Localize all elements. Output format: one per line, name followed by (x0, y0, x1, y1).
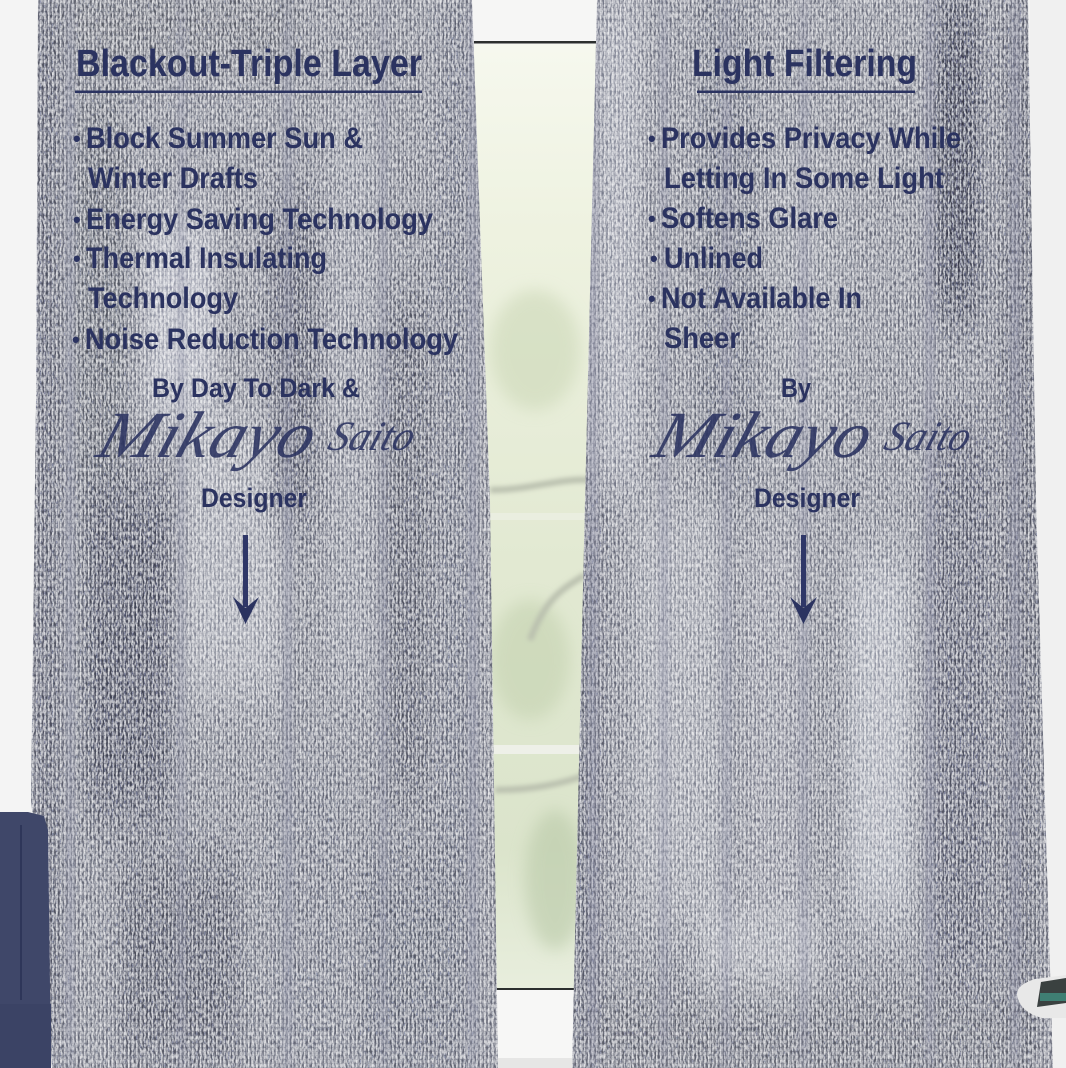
left curtain feature list: Technology (88, 282, 238, 315)
left designer credit: Saito (323, 414, 422, 460)
left designer credit: Mikayo (88, 399, 327, 472)
sofa (0, 812, 51, 1068)
left designer credit: Designer (201, 483, 307, 513)
right curtain feature list: • (648, 126, 656, 151)
right curtain heading: Light Filtering (692, 43, 917, 85)
left curtain feature list: • (72, 327, 80, 352)
panel: right curtain (560, 0, 1060, 1068)
window (470, 0, 600, 1068)
right designer credit: Saito (879, 414, 978, 460)
right curtain feature list: • (648, 206, 656, 231)
icon: left down arrow (233, 535, 259, 624)
left designer credit: By Day To Dark & (152, 373, 360, 403)
right curtain feature list: Not Available In (661, 282, 862, 315)
right curtain feature list: Unlined (664, 242, 763, 275)
left curtain feature list: • (73, 126, 81, 151)
left curtain feature list: • (73, 246, 81, 271)
right curtain feature list: Letting In Some Light (664, 162, 944, 195)
side table with tablet (1017, 975, 1066, 1018)
right designer credit (644, 373, 978, 513)
left curtain feature list: Block Summer Sun & (86, 122, 363, 155)
right curtain feature list: Sheer (664, 322, 740, 355)
panel: left curtain (20, 0, 510, 1068)
left curtain feature list: Noise Reduction Technology (85, 323, 458, 356)
left curtain feature list: Thermal Insulating (86, 242, 327, 275)
left curtain feature list: Winter Drafts (88, 162, 258, 195)
right curtain feature list (648, 122, 961, 355)
left curtain feature list: Energy Saving Technology (86, 203, 433, 236)
right curtain feature list: Softens Glare (661, 202, 838, 235)
left curtain feature list (72, 122, 458, 356)
right curtain feature list: • (648, 286, 656, 311)
right designer credit: Mikayo (644, 399, 883, 472)
right designer credit: By (781, 373, 811, 403)
right curtain feature list: • (650, 246, 658, 271)
right curtain feature list: Provides Privacy While (661, 122, 961, 155)
right designer credit: Designer (754, 483, 860, 513)
icon: right down arrow (790, 535, 817, 624)
left curtain feature list: • (73, 207, 81, 232)
left designer credit (88, 373, 422, 513)
left curtain heading: Blackout-Triple Layer (76, 43, 422, 85)
